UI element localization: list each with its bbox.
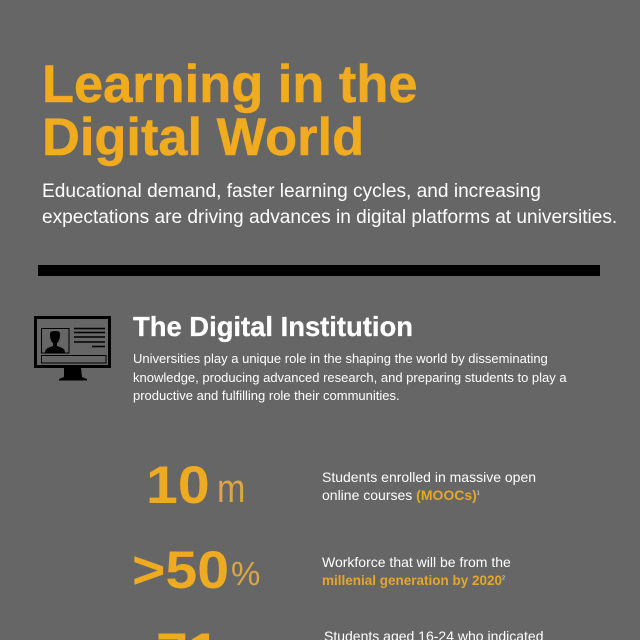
stat text: MOOCs xyxy=(322,469,536,503)
title xyxy=(42,56,417,167)
section heading: The Digital Institution xyxy=(133,310,413,342)
stat text: MOOCs: online courses (MOOCs)1 xyxy=(322,487,480,503)
section description: knowledge, producing advanced research, and preparing students to play a xyxy=(133,370,567,384)
icon: computer monitor with profile xyxy=(34,316,111,380)
stat: >50%: % xyxy=(231,555,260,592)
stat: 10m: 10 xyxy=(146,456,210,515)
stat text: workforce: millenial generation by 20202 xyxy=(322,573,505,588)
stat text: MOOCs: Students enrolled in massive open xyxy=(322,469,536,485)
divider bar xyxy=(38,265,600,276)
stat text: workforce: Workforce that will be from the xyxy=(322,554,511,570)
title: Learning in the xyxy=(42,56,417,114)
stat: >50%: >50 xyxy=(132,541,229,600)
section description xyxy=(133,351,567,403)
section description: productive and fulfilling role their communities. xyxy=(133,388,400,403)
subtitle: expectations are driving advances in digital platforms at universities. xyxy=(42,207,617,228)
section description: Universities play a unique role in the shaping the world by disseminating xyxy=(133,351,548,366)
subtitle: Educational demand, faster learning cycles, and increasing xyxy=(42,181,541,202)
subtitle xyxy=(42,181,617,228)
stat: 10m xyxy=(146,456,245,515)
stat text: workforce xyxy=(322,554,511,588)
stat: 10m: m xyxy=(217,467,245,511)
title: Digital World xyxy=(42,109,364,167)
